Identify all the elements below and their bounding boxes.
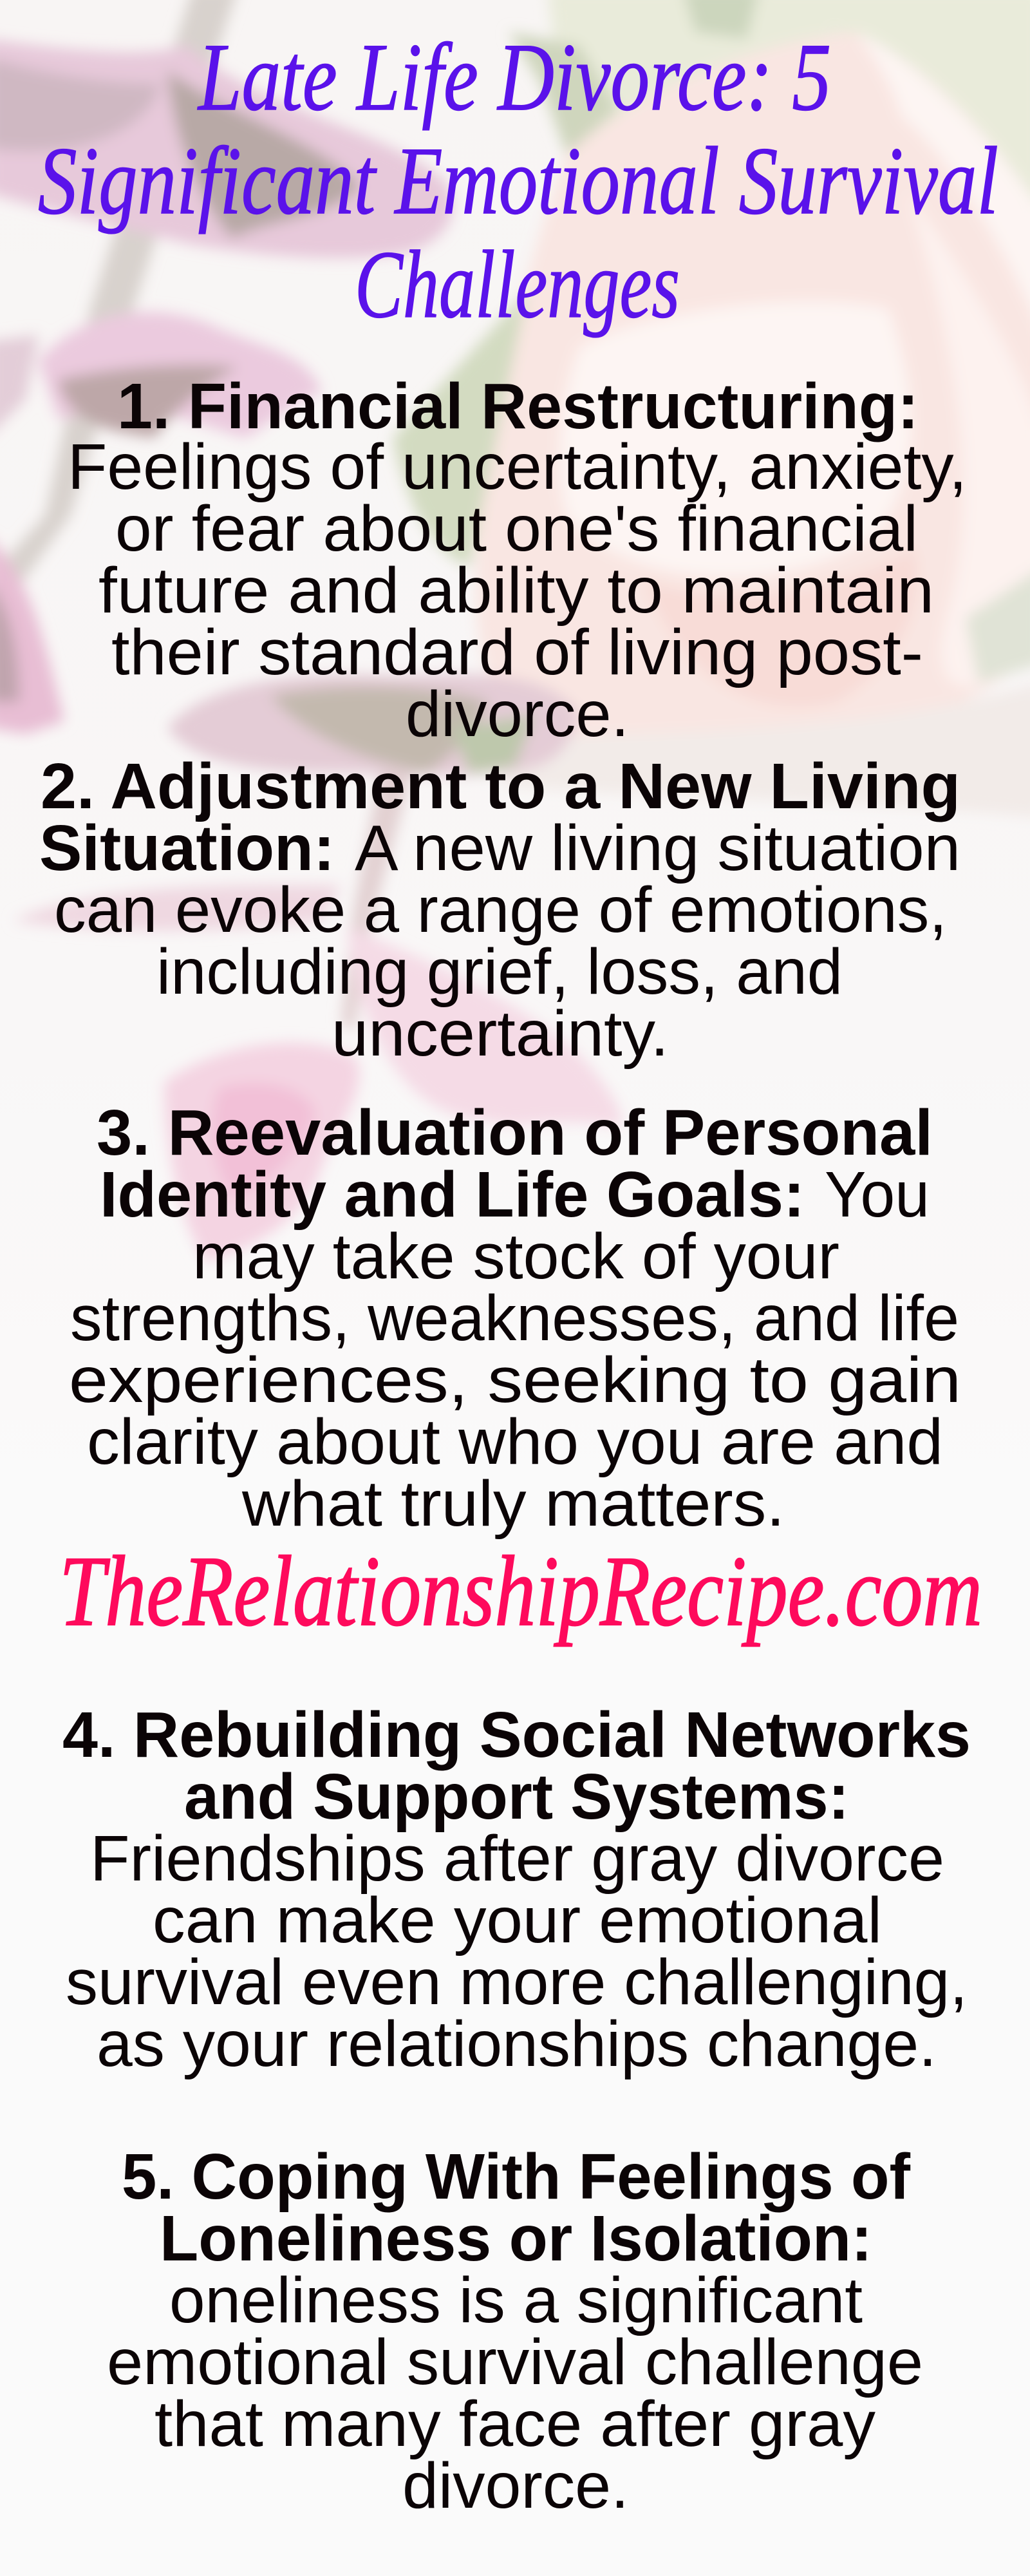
stem <box>0 0 238 631</box>
pink leaf left <box>13 885 341 931</box>
section 5: loneliness: Loneliness or Isolation: <box>160 2202 872 2275</box>
stem to flowers <box>341 773 412 1030</box>
section 4: social networks <box>62 1699 971 2080</box>
section 3: personal identity: clarity about who you are and <box>87 1406 943 1478</box>
section 1: financial restructuring: Feelings of uncertainty, anxiety, <box>68 431 967 503</box>
section 2: new living situation <box>39 750 960 1070</box>
section 4: social networks: Friendships after gray divorce <box>90 1823 944 1895</box>
section 5: loneliness: that many face after gray <box>154 2388 876 2460</box>
section 2: new living situation: including grief, loss, and <box>156 936 843 1008</box>
section 4: social networks: 4. Rebuilding Social Networks <box>62 1699 971 1771</box>
title <box>38 24 998 338</box>
foliage top right <box>547 0 1030 206</box>
section 5: loneliness <box>107 2141 923 2522</box>
section 4: social networks: can make your emotional <box>153 1884 882 1956</box>
mauve leaf upper left <box>0 39 453 258</box>
section 1: financial restructuring: divorce. <box>406 678 629 750</box>
section 2: new living situation: Situation: <box>39 812 335 884</box>
section 3: personal identity <box>69 1097 961 1540</box>
rose body <box>476 32 1030 773</box>
title: Late Life Divorce: 5 <box>197 24 831 131</box>
section 5: loneliness: oneliness is a significant <box>169 2264 863 2336</box>
section 1: financial restructuring: their standard of living post- <box>111 616 923 688</box>
pink flower lower <box>164 1043 359 1262</box>
section 3: personal identity: strengths, weaknesses, and life <box>70 1282 959 1354</box>
leaf over section 2 <box>167 674 579 775</box>
section 3: personal identity: You <box>825 1159 930 1231</box>
mauve leaf mid left <box>39 312 322 438</box>
section 1: financial restructuring <box>68 370 967 750</box>
section 2: new living situation: can evoke a range of emotions, <box>54 874 947 946</box>
section 3: personal identity: 3. Reevaluation of Personal <box>97 1097 933 1169</box>
section 5: loneliness: divorce. <box>402 2450 629 2522</box>
section 3: personal identity: what truly matters. <box>241 1468 785 1540</box>
title: Challenges <box>355 231 680 338</box>
section 4: social networks: survival even more challenging, <box>66 1946 968 2018</box>
section 2: new living situation: uncertainty. <box>332 998 669 1070</box>
section 5: loneliness: emotional survival challenge <box>107 2326 923 2398</box>
haze along rose bottom <box>502 683 1030 818</box>
section 5: loneliness: 5. Coping With Feelings of <box>122 2141 911 2213</box>
section 3: personal identity: may take stock of your <box>192 1220 839 1293</box>
section 2: new living situation: 2. Adjustment to a New Living <box>41 750 960 822</box>
section 1: financial restructuring: future and ability to maintain <box>98 554 934 627</box>
section 1: financial restructuring: or fear about one's financial <box>115 493 918 565</box>
section 2: new living situation: A new living situation <box>355 812 960 884</box>
green leaf centre <box>393 290 528 567</box>
section 1: financial restructuring: 1. Financial Restructuring: <box>117 370 919 442</box>
section 3: personal identity: experiences, seeking to gain <box>69 1344 961 1416</box>
pink flower right <box>348 927 622 1127</box>
section 4: social networks: and Support Systems: <box>184 1761 849 1833</box>
leaf left edge <box>0 335 39 438</box>
section 3: personal identity: Identity and Life Goals: <box>100 1159 805 1231</box>
section 4: social networks: as your relationships change. <box>97 2008 937 2080</box>
